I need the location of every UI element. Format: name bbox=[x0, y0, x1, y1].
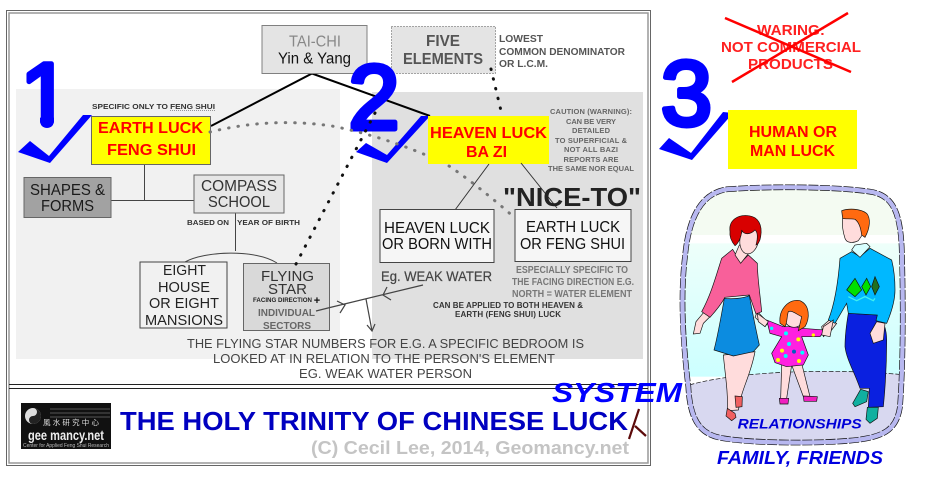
box: flying star: FACING DIRECTION bbox=[253, 298, 312, 304]
note: based on year of birth: BASED ON bbox=[187, 218, 229, 227]
connector: solid line from tai-chi to both lucks bbox=[211, 74, 430, 126]
panel: heaven luck background bbox=[372, 92, 643, 359]
note: can be applied to both bbox=[433, 301, 583, 319]
box: earth luck or feng shui: EARTH LUCK bbox=[526, 219, 621, 236]
note: caution warning: CAUTION (WARNING): bbox=[550, 107, 632, 116]
box: heaven luck or born with: HEAVEN LUCK bbox=[384, 220, 491, 237]
arrow: flow lines between flying star and weak water bbox=[316, 285, 423, 331]
box: compass school: COMPASS bbox=[201, 178, 277, 195]
box: flying star: INDIVIDUAL bbox=[258, 308, 315, 319]
note: caution warning bbox=[548, 107, 634, 173]
note: especially specific to facing direction: THE FACING DIRECTION E.G. bbox=[512, 277, 634, 288]
crossed-out warning: WARING: bbox=[757, 22, 825, 39]
crossed-out warning: NOT COMMERCIAL bbox=[721, 39, 861, 56]
box: five elements: ELEMENTS bbox=[403, 51, 483, 68]
box: eight house or eight mansions: HOUSE bbox=[158, 279, 210, 296]
note: caution warning: DETAILED bbox=[572, 126, 611, 135]
logo: geomancy.net: gee mancy.net bbox=[28, 427, 104, 443]
note: especially specific to facing direction: ESPECIALLY SPECIFIC TO bbox=[516, 265, 628, 276]
box: earth luck feng shui: FENG SHUI bbox=[107, 142, 196, 159]
connector: dotted grey curve from earth luck to nice-to box bbox=[210, 123, 517, 220]
note: lowest common denominator: LOWEST bbox=[499, 34, 543, 45]
numeral 3: 3 bbox=[661, 43, 712, 145]
label: family, friends: FAMILY, FRIENDS bbox=[717, 447, 884, 468]
box: heaven luck or born with: OR BORN WITH bbox=[382, 236, 492, 253]
note: especially specific to facing direction: NORTH = WATER ELEMENT bbox=[512, 289, 632, 300]
text block: flying star explanation bbox=[187, 336, 584, 381]
title: THE HOLY TRINITY OF CHINESE LUCK bbox=[120, 406, 628, 436]
box: flying star: STAR bbox=[268, 281, 307, 298]
panel: earth luck background bbox=[16, 89, 340, 359]
text block: flying star explanation: THE FLYING STAR NUMBERS FOR E.G. A SPECIFIC BEDROOM IS bbox=[187, 336, 584, 351]
insertion caret bbox=[629, 409, 646, 439]
box: earth luck feng shui: EARTH LUCK bbox=[98, 120, 203, 137]
note: caution warning: THE SAME NOR EQUAL bbox=[548, 164, 634, 173]
figure: father bbox=[822, 209, 895, 423]
numeral 1: 1 bbox=[20, 45, 71, 147]
note: caution warning: NOT ALL BAZI bbox=[564, 145, 618, 154]
box: eight house or eight mansions: OR EIGHT bbox=[149, 295, 219, 312]
box: five elements: FIVE bbox=[426, 33, 460, 50]
box: tai-chi: Yin & Yang bbox=[278, 50, 351, 68]
note: caution warning: REPORTS ARE bbox=[564, 155, 618, 164]
figure: girl bbox=[757, 300, 833, 404]
copyright: (C) Cecil Lee, 2014, Geomancy.net bbox=[311, 438, 629, 458]
main frame bbox=[6, 10, 650, 466]
illustration: family in rounded frame: RELATIONSHIPS bbox=[738, 415, 862, 431]
box: earth luck or feng shui: OR FENG SHUI bbox=[520, 236, 625, 253]
check mark 3 bbox=[659, 112, 733, 160]
note: can be applied to both: CAN BE APPLIED TO BOTH HEAVEN & bbox=[433, 301, 583, 310]
connector: black dotted line from flying star to heaven luck bbox=[296, 113, 375, 264]
box: eight house or eight mansions: EIGHT bbox=[163, 262, 206, 279]
check mark 2 bbox=[356, 116, 430, 163]
note: caution warning: TO SUPERFICIAL & bbox=[555, 136, 628, 145]
box: compass school bbox=[194, 175, 284, 213]
note: based on year of birth bbox=[187, 218, 300, 227]
box: shapes and forms bbox=[24, 178, 111, 218]
numeral 2: 2 bbox=[348, 47, 400, 149]
label: eg. weak water: Eg. WEAK WATER bbox=[381, 268, 492, 284]
figure: mother bbox=[693, 215, 768, 421]
box: tai-chi bbox=[262, 26, 367, 74]
crossed-out warning: PRODUCTS bbox=[748, 56, 833, 73]
note: especially specific to facing direction bbox=[512, 265, 634, 300]
check mark 1 bbox=[18, 115, 92, 163]
box: flying star: FLYING bbox=[261, 268, 314, 285]
box: eight house or eight mansions bbox=[140, 262, 227, 329]
crossed-out warning bbox=[721, 13, 861, 82]
box: shapes and forms: SHAPES & bbox=[30, 182, 106, 199]
note: lowest common denominator bbox=[499, 34, 626, 70]
connector: black dotted line from five elements to heaven luck bbox=[491, 69, 502, 115]
text block: flying star explanation: EG. WEAK WATER PERSON bbox=[299, 366, 472, 381]
box: earth luck or feng shui bbox=[515, 210, 631, 262]
box: heaven luck ba zi bbox=[428, 116, 549, 164]
box: eight house or eight mansions: MANSIONS bbox=[145, 312, 223, 329]
note: specific only to feng shui: SPECIFIC ONLY TO FENG SHUI bbox=[92, 102, 215, 111]
box: earth luck feng shui bbox=[92, 116, 210, 164]
box: tai-chi: TAI-CHI bbox=[289, 34, 341, 50]
logo: geomancy.net bbox=[21, 403, 111, 449]
note: based on year of birth: YEAR OF BIRTH bbox=[237, 218, 300, 227]
note: lowest common denominator: COMMON DENOMINATOR bbox=[499, 47, 626, 58]
box: human or man luck bbox=[728, 110, 857, 169]
box: shapes and forms: FORMS bbox=[41, 198, 94, 215]
note: can be applied to both: EARTH (FENG SHUI) LUCK bbox=[455, 310, 561, 319]
note: lowest common denominator: OR L.C.M. bbox=[499, 59, 548, 70]
text block: flying star explanation: LOOKED AT IN RELATION TO THE PERSON'S ELEMENT bbox=[213, 351, 555, 366]
logo: geomancy.net: Center for Applied Feng Shui Research bbox=[23, 443, 109, 449]
box: heaven luck or born with bbox=[380, 210, 494, 262]
box: human or man luck: HUMAN OR bbox=[749, 124, 837, 141]
box: compass school: SCHOOL bbox=[208, 194, 270, 211]
logo: geomancy.net: 風水研究中心 bbox=[43, 417, 100, 427]
illustration: family in rounded frame bbox=[680, 187, 907, 447]
label: system: SYSTEM bbox=[552, 377, 683, 408]
box: flying star: + bbox=[314, 295, 320, 307]
box: flying star bbox=[244, 264, 330, 332]
note: caution warning: CAN BE VERY bbox=[566, 117, 616, 126]
tree lines: earth luck branches bbox=[111, 165, 277, 263]
box: heaven luck ba zi: BA ZI bbox=[466, 144, 507, 161]
box: human or man luck: MAN LUCK bbox=[750, 143, 835, 160]
box: flying star: SECTORS bbox=[263, 321, 311, 332]
box: five elements bbox=[392, 26, 496, 74]
heading: nice-to: "NICE-TO" bbox=[503, 182, 641, 212]
box: heaven luck ba zi: HEAVEN LUCK bbox=[430, 125, 547, 142]
tree lines: heaven luck branches bbox=[455, 163, 557, 210]
